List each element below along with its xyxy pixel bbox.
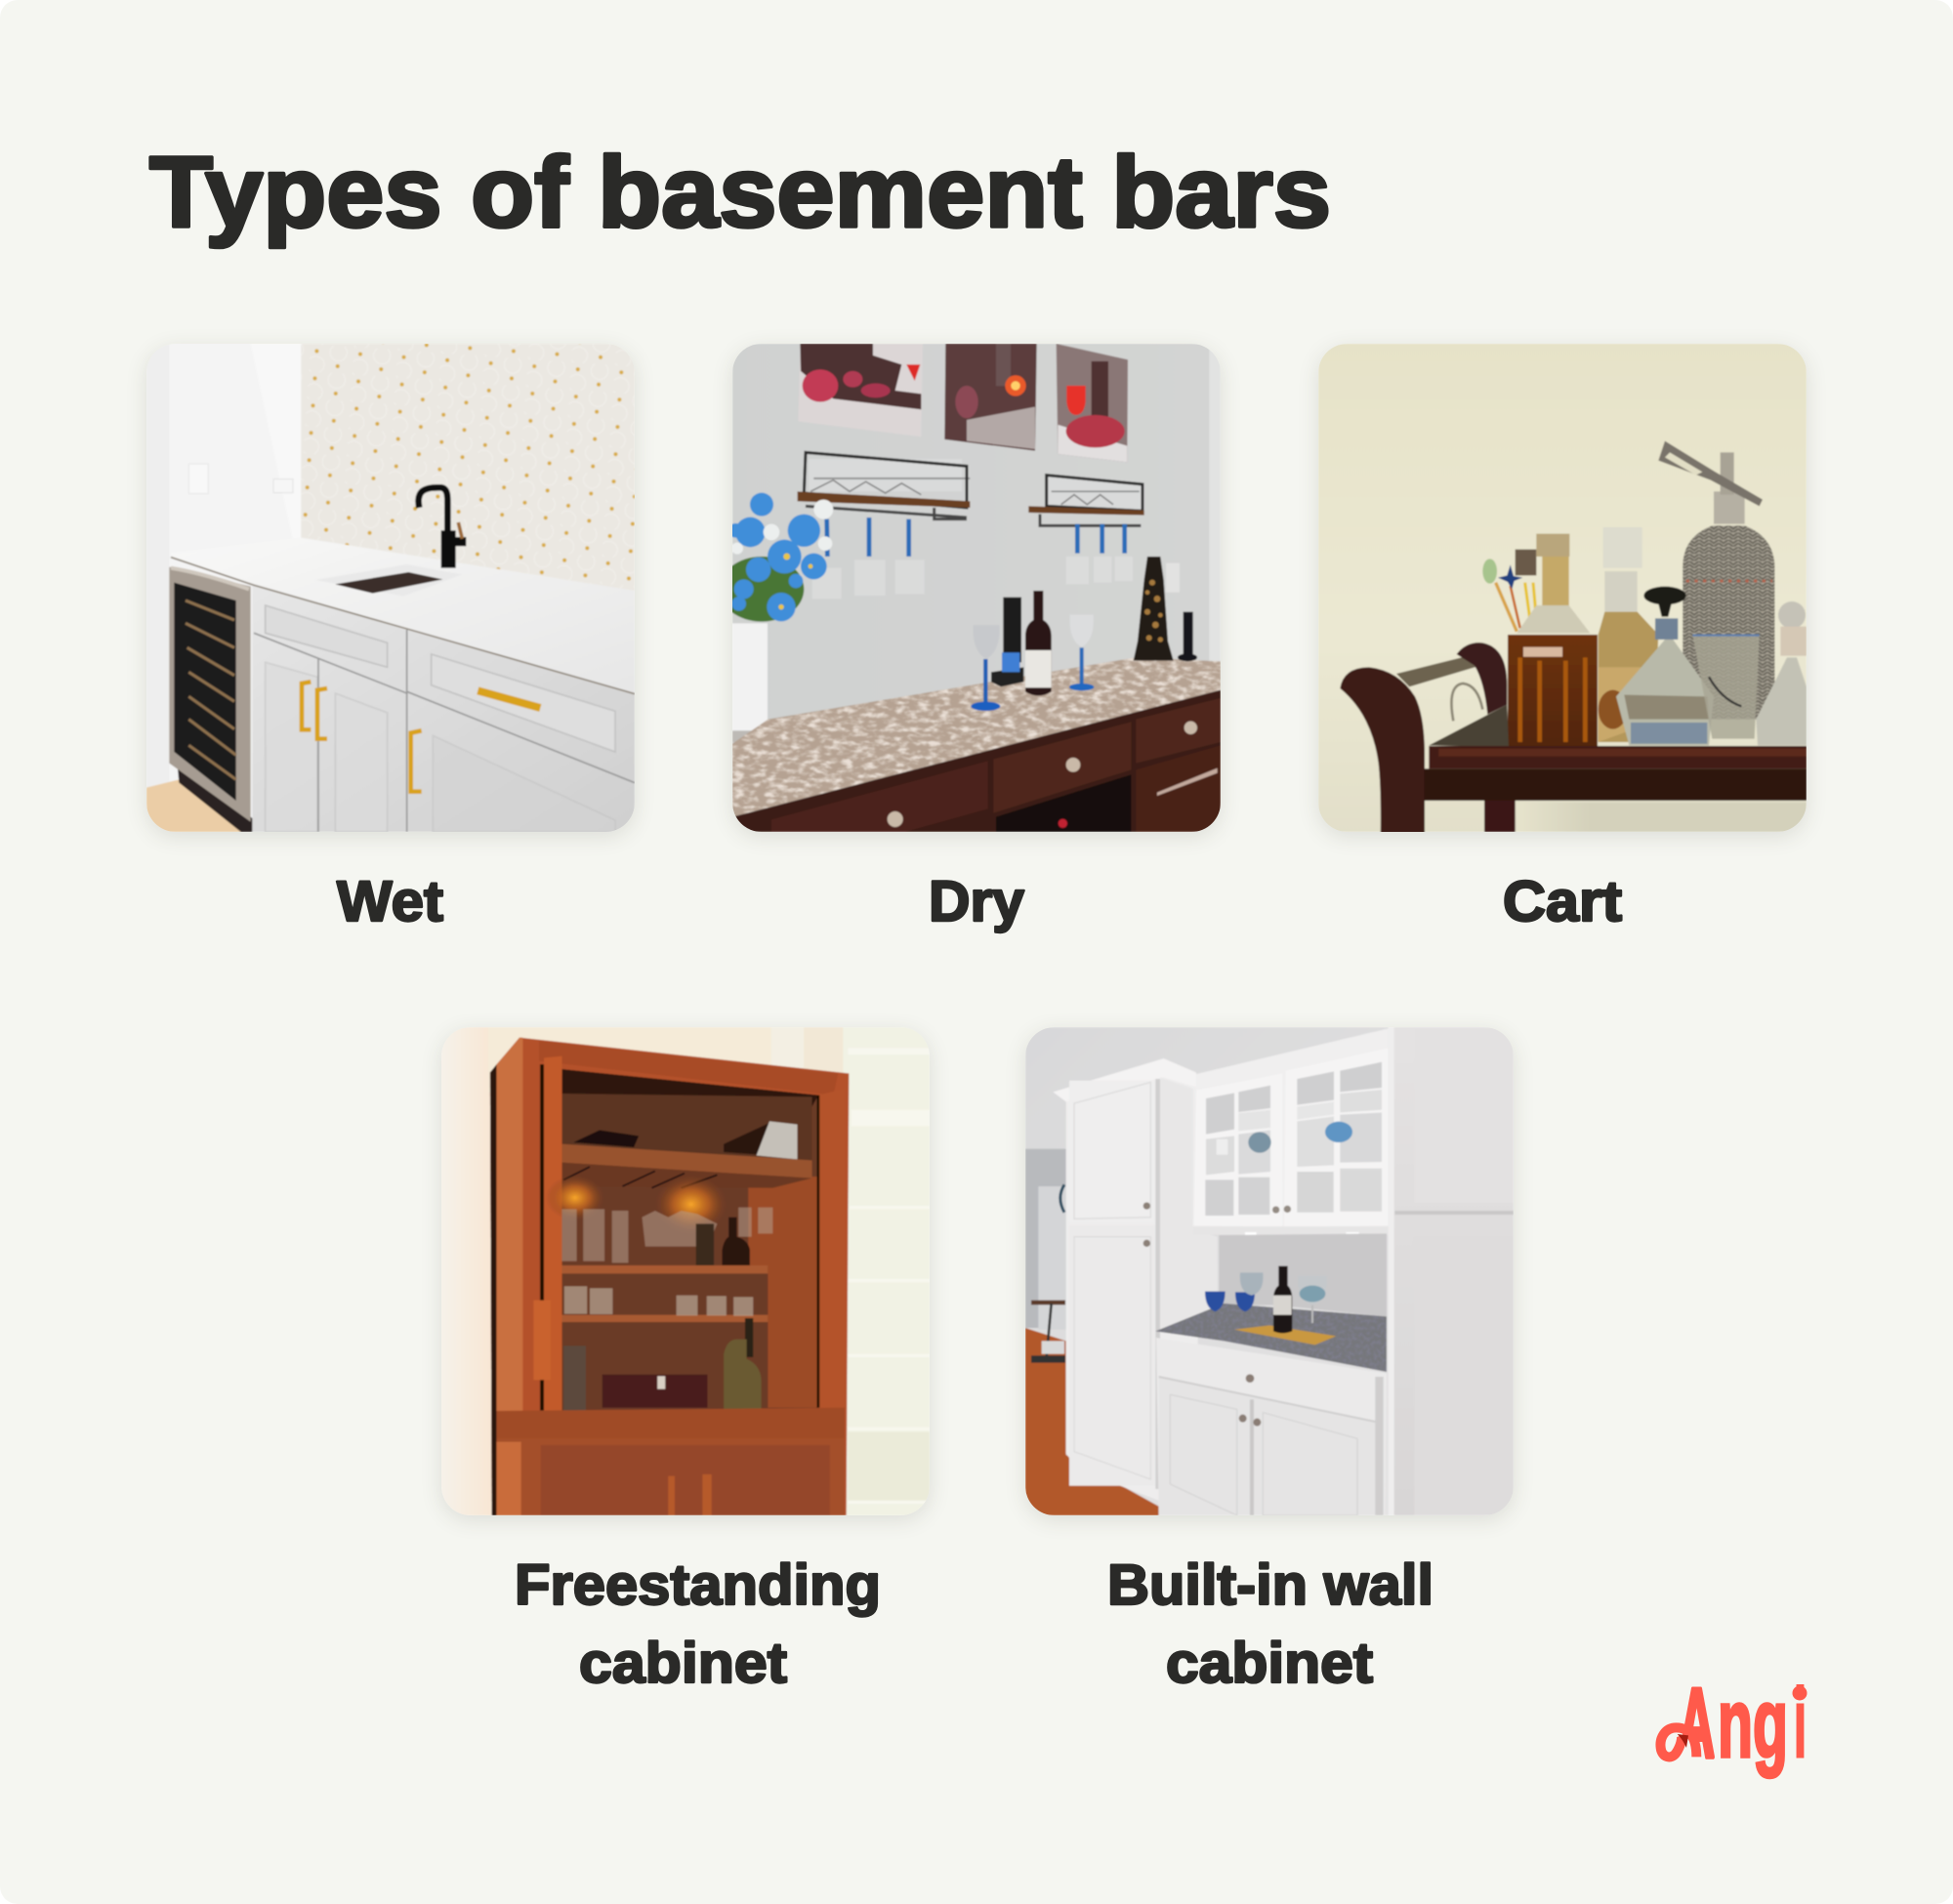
label: cart: Cart [1503,870,1622,933]
pyramid decanter [1616,587,1714,745]
label: dry: Dry [929,870,1024,933]
logo: Angi: ng [1718,1669,1788,1778]
panel: freestanding cabinet photo [441,1027,930,1515]
right decanter [1756,601,1807,745]
labels: i [1794,1669,1807,1778]
glass [1692,635,1760,739]
label: built-in wall cabinet: Built-in wall [1107,1553,1434,1617]
panel: dry bar photo [732,344,1221,832]
panel: wet bar photo [146,344,635,832]
label: built-in wall cabinet: cabinet [1166,1632,1373,1695]
label: freestanding cabinet: Freestanding [515,1553,881,1617]
logo: Angi: A [1679,1669,1715,1778]
panel: built-in wall cabinet photo [1025,1027,1514,1515]
label: wet: Wet [337,870,443,933]
label: freestanding cabinet [515,1553,881,1695]
amber bottle [1508,534,1598,747]
siphon [1658,441,1774,720]
decanter gold [1599,527,1658,742]
label: freestanding cabinet: cabinet [579,1632,787,1695]
stirrers [1482,550,1536,632]
title: Types of basement bars [149,136,1331,248]
cart handle [1340,642,1807,858]
label: built-in wall cabinet [1107,1553,1434,1695]
panel: cart photo [1318,344,1807,832]
logo: Angi [1660,1669,1807,1778]
flowers vase [720,493,833,742]
